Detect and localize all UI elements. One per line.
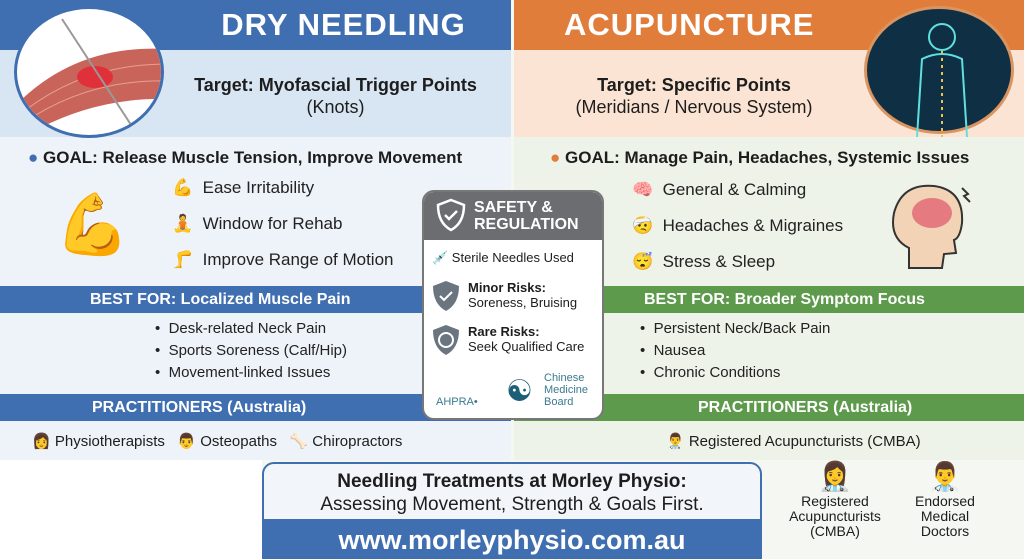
practitioners list: 👨‍⚕️ Registered Acupuncturists (CMBA) — [666, 433, 921, 450]
best for list: • Sports Soreness (Calf/Hip) — [155, 342, 347, 359]
safety header: SAFETY & — [474, 199, 553, 216]
target band: (Knots) — [306, 97, 365, 117]
safety items: Soreness, Bruising — [468, 295, 577, 310]
best for list: • Desk-related Neck Pain — [155, 320, 326, 337]
practitioners bar — [514, 394, 1024, 421]
practitioners bar: PRACTITIONERS (Australia) — [92, 399, 306, 416]
best for bar: BEST FOR: Broader Symptom Focus — [644, 291, 925, 308]
safety header: REGULATION — [474, 216, 579, 233]
practitioner figures: Endorsed — [915, 493, 975, 509]
practitioner figures: Acupuncturists — [789, 508, 881, 524]
target band: Target: Myofascial Trigger Points — [194, 75, 477, 95]
best for list: • Persistent Neck/Back Pain — [640, 320, 830, 337]
header: dry needling: DRY NEEDLING — [221, 7, 466, 42]
practitioner figures: Doctors — [921, 523, 969, 539]
target band — [0, 50, 511, 137]
best for bar — [0, 286, 511, 313]
goal heading: ● GOAL: Manage Pain, Headaches, Systemic Issues — [550, 148, 969, 167]
header: acupuncture — [514, 0, 1024, 50]
logos: Chinese — [544, 372, 584, 384]
left footer background — [0, 460, 262, 559]
practitioner figures: Medical — [921, 508, 969, 524]
best for list — [640, 320, 830, 381]
goal heading: ● GOAL: Release Muscle Tension, Improve Movement — [28, 148, 462, 167]
header: acupuncture: ACUPUNCTURE — [564, 7, 814, 42]
header: dry needling — [0, 0, 511, 50]
practitioner figures: 👨‍⚕️ — [928, 461, 962, 492]
panel: acupuncture — [514, 0, 1024, 460]
callout text: Assessing Movement, Strength & Goals First. — [320, 494, 704, 515]
goal items: 🧘 Window for Rehab — [172, 214, 342, 233]
target band — [514, 50, 1024, 137]
safety items: Rare Risks: — [468, 324, 540, 339]
target band: (Meridians / Nervous System) — [575, 97, 813, 117]
logos: Medicine — [544, 384, 588, 396]
safety header — [424, 192, 604, 240]
target band: Target: Specific Points — [597, 75, 791, 95]
goal items — [172, 178, 394, 269]
best for list: • Movement-linked Issues — [155, 364, 330, 381]
practitioners bar: PRACTITIONERS (Australia) — [698, 399, 912, 416]
url bar — [264, 519, 760, 559]
logos: ☯ — [506, 375, 533, 408]
goal items: 🧠 General & Calming — [632, 180, 806, 199]
practitioners list: 👩 Physiotherapists 👨 Osteopaths 🦴 Chiropractors — [32, 433, 402, 450]
best for list: • Nausea — [640, 342, 705, 359]
callout: morley physio — [262, 462, 762, 559]
logos — [436, 372, 588, 408]
goal items — [632, 180, 843, 271]
icon: flexed arm: 💪 — [55, 191, 130, 258]
callout text: Needling Treatments at Morley Physio: — [337, 471, 687, 492]
safety items: Minor Risks: — [468, 280, 546, 295]
url bar: www.morleyphysio.com.au — [338, 525, 686, 555]
best for list: • Chronic Conditions — [640, 364, 780, 381]
logos: Board — [544, 396, 573, 408]
practitioner figures: 👩‍⚕️ — [818, 461, 852, 492]
icon: muscle with needle — [14, 6, 164, 138]
best for bar: BEST FOR: Localized Muscle Pain — [90, 291, 350, 308]
panel: safety & regulation — [422, 190, 604, 420]
icon: body meridians — [864, 6, 1014, 134]
best for list — [155, 320, 347, 381]
safety items: 💉 Sterile Needles Used — [432, 250, 574, 265]
icon: head with headache — [892, 184, 971, 269]
goal items: 💪 Ease Irritability — [172, 178, 314, 197]
practitioner figures: (CMBA) — [810, 523, 860, 539]
callout text — [320, 471, 704, 515]
logos: AHPRA• — [436, 396, 478, 408]
panel: dry needling — [0, 0, 511, 460]
safety items: Seek Qualified Care — [468, 339, 584, 354]
safety items — [432, 250, 584, 355]
practitioners bar — [0, 394, 511, 421]
goal items: 🤕 Headaches & Migraines — [632, 216, 843, 235]
goal items: 🦵 Improve Range of Motion — [172, 250, 394, 269]
practitioner figures: Registered — [801, 493, 869, 509]
goal items: 😴 Stress & Sleep — [632, 252, 775, 271]
practitioner figures — [789, 460, 975, 539]
best for bar — [514, 286, 1024, 313]
